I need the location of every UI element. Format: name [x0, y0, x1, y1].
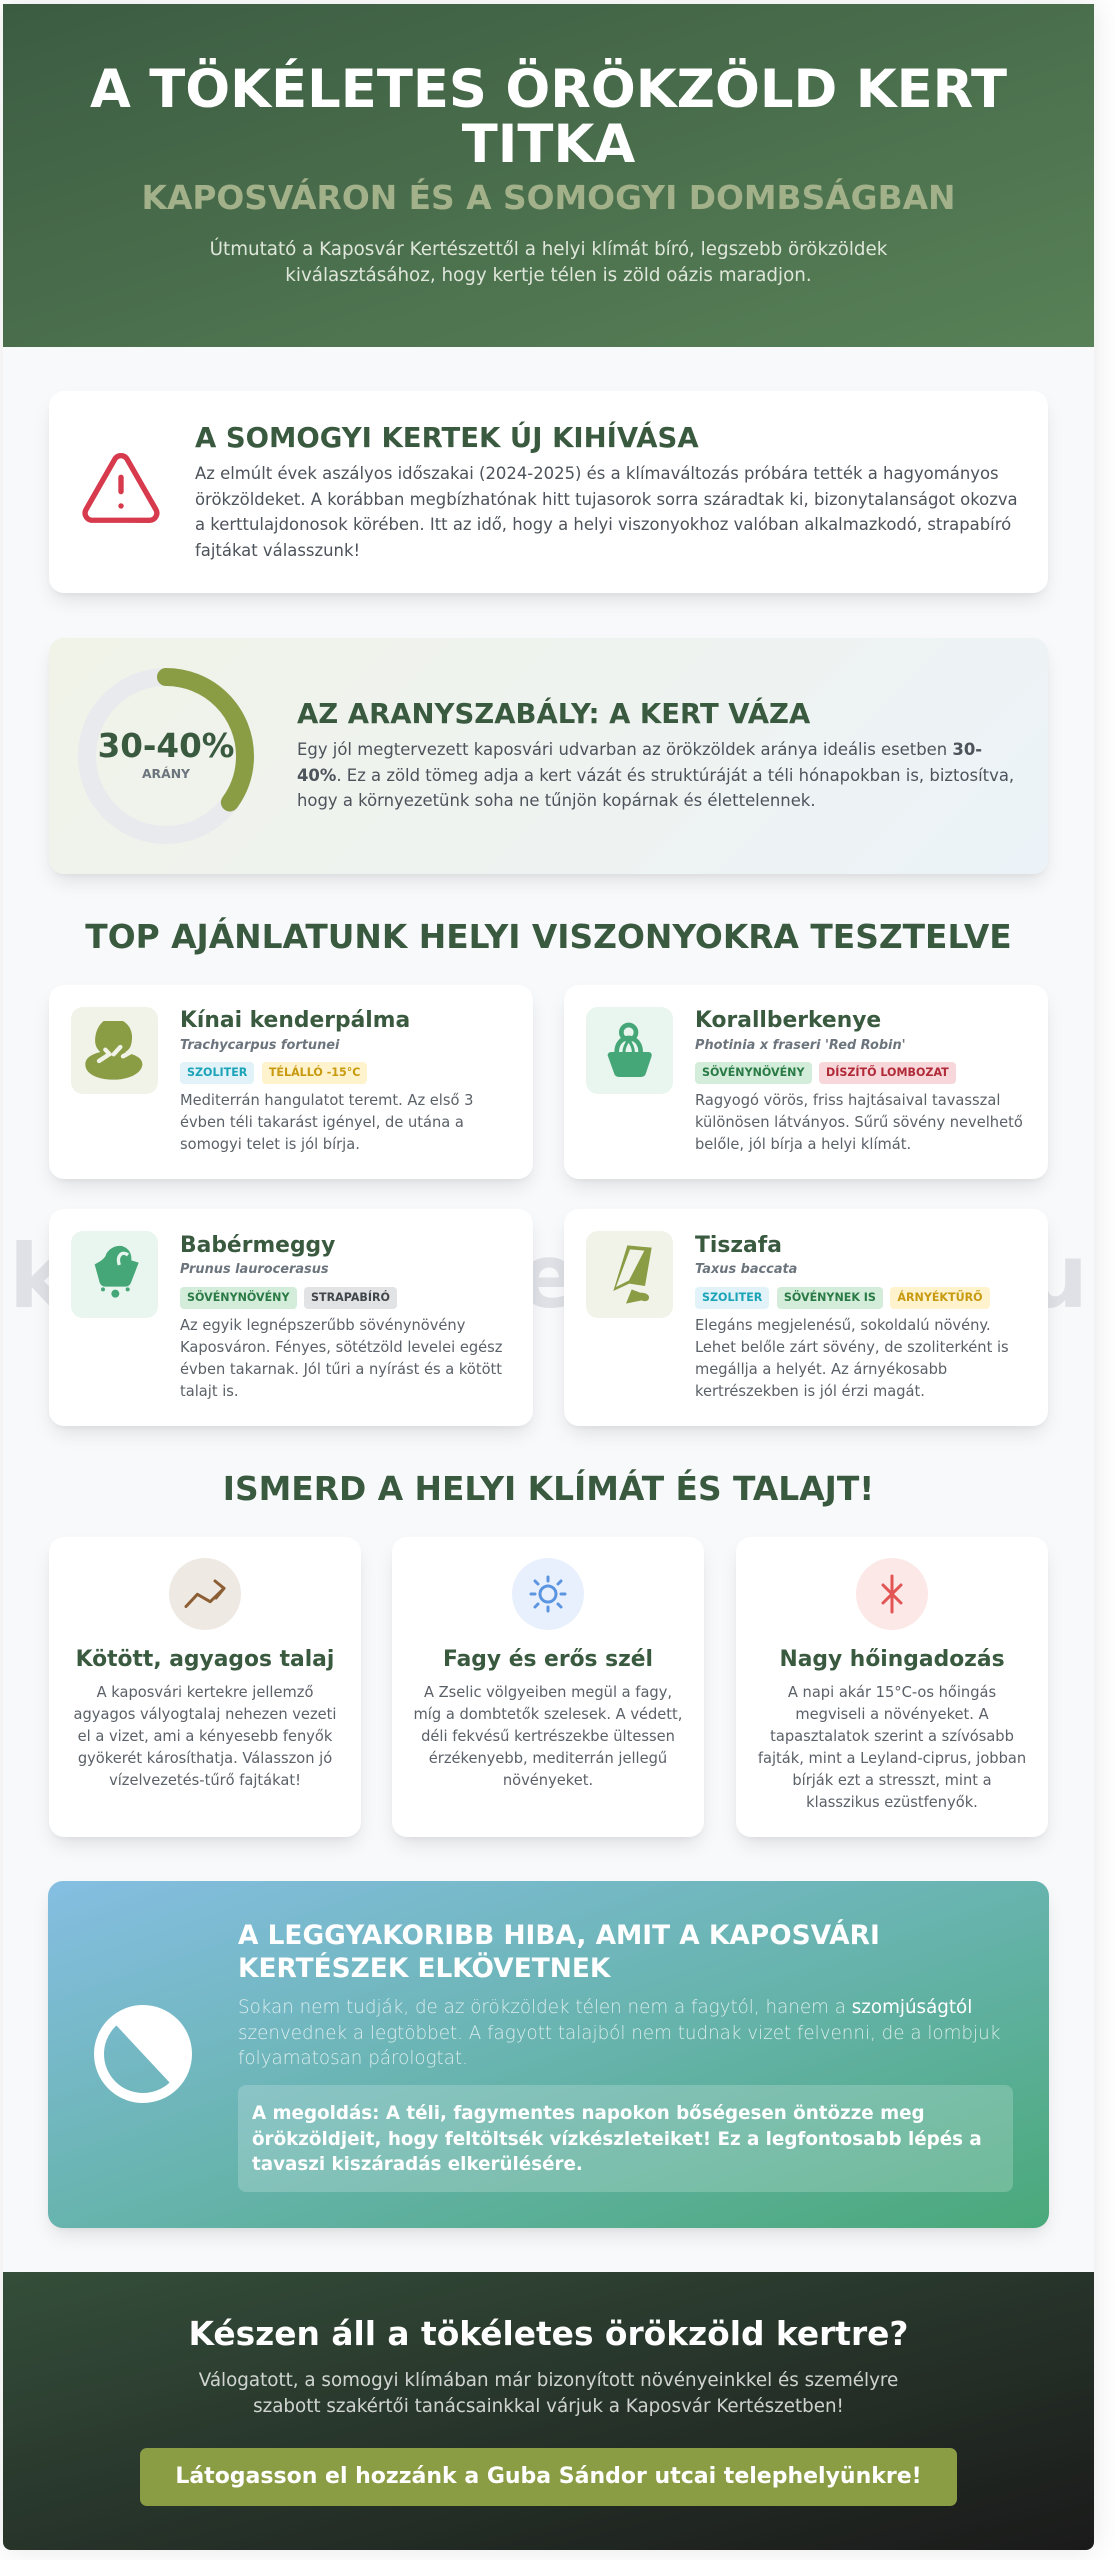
- icon: asterisk: [856, 1558, 928, 1630]
- description: Mediterrán hangulatot teremt. Az első 3: [180, 1092, 473, 1109]
- tags: [695, 1062, 956, 1084]
- plant card: Babérmeggy: [49, 1209, 533, 1426]
- latin name: Prunus laurocerasus: [180, 1262, 329, 1277]
- donut label: ARÁNY: [142, 766, 190, 781]
- description: [180, 1317, 502, 1400]
- plant name: Kínai kenderpálma: [180, 1008, 410, 1033]
- CTA button: [140, 2448, 957, 2506]
- card text: vízelvezetés-tűrő fajtákat!: [109, 1772, 301, 1789]
- mistake text: szenvednek a legtöbbet. A fagyott talajból nem tudnak vizet felvenni, de a lombjuk: [238, 2023, 1000, 2044]
- golden rule text: [297, 740, 1014, 810]
- mistake heading: A LEGGYAKORIBB HIBA, AMIT A KAPOSVÁRI: [238, 1920, 880, 1950]
- challenge text: [195, 464, 1018, 560]
- description: Ragyogó vörös, friss hajtásaival tavasszal: [695, 1092, 1000, 1109]
- card text: [74, 1684, 336, 1789]
- description: Elegáns megjelenésű, sokoldalú növény.: [695, 1317, 991, 1334]
- tags: SÖVÉNYNÖVÉNY: [187, 1291, 290, 1304]
- latin name: Photinia x fraseri 'Red Robin': [695, 1038, 906, 1053]
- challenge heading: A SOMOGYI KERTEK ÚJ KIHÍVÁSA: [195, 422, 699, 454]
- golden rule text: Egy jól megtervezett kaposvári udvarban az örökzöldek aránya ideális esetben 30-: [297, 740, 982, 759]
- description: Kaposváron. Fényes, sötétzöld levelei egész: [180, 1339, 502, 1356]
- panel: common mistake: [48, 1881, 1049, 2228]
- solution text: [252, 2103, 982, 2175]
- card heading: Fagy és erős szél: [443, 1647, 653, 1672]
- card text: míg a dombtetők szelesek. A védett,: [414, 1706, 682, 1723]
- climate card: temperature swings: [736, 1537, 1048, 1837]
- icon: laurel: [71, 1231, 158, 1318]
- card text: A kaposvári kertekre jellemző: [97, 1684, 313, 1701]
- tags: TÉLÁLLÓ -15°C: [269, 1066, 360, 1079]
- plant name: Korallberkenye: [695, 1008, 881, 1033]
- description: évben téli takarást igényel, de utána a: [180, 1114, 464, 1131]
- card text: fajták, mint a Leyland-ciprus, jobban: [758, 1750, 1026, 1767]
- card text: agyagos vályogtalaj nehezen vezeti: [74, 1706, 336, 1723]
- golden rule text: 40%. Ez a zöld tömeg adja a kert vázát és struktúráját a téli hónapokban is, biztosítva,: [297, 766, 1014, 785]
- heading: top recommendations: TOP AJÁNLATUNK HELYI VISZONYOKRA TESZTELVE: [85, 918, 1012, 956]
- solution box: [238, 2085, 1013, 2192]
- solution text: örökzöldjeit, hogy feltöltsék vízkészleteiket! Ez a legfontosabb lépés a: [252, 2129, 982, 2150]
- card heading: Nagy hőingadozás: [779, 1647, 1005, 1672]
- plant name: Tiszafa: [695, 1233, 782, 1258]
- plant card: Korallberkenye: [564, 985, 1048, 1179]
- donut value: 30-40%: [98, 727, 234, 765]
- intro text: kiválasztásához, hogy kertje télen is zöld oázis maradjon.: [285, 265, 812, 286]
- tags: SZOLITER: [187, 1066, 247, 1079]
- challenge text: fajtákat válasszunk!: [195, 541, 360, 560]
- plant card: Tiszafa: [564, 1209, 1048, 1426]
- description: különösen látványos. Sűrű sövény nevelhető: [695, 1114, 1023, 1131]
- mistake heading: [238, 1919, 880, 1984]
- donut chart: 30-40%: [78, 668, 254, 844]
- call to action footer: [3, 2272, 1094, 2550]
- CTA button: Látogasson el hozzánk a Guba Sándor utcai telephelyünkre!: [175, 2464, 922, 2489]
- CTA text: szabott szakértői tanácsainkkal várjuk a Kaposvár Kertészetben!: [253, 2396, 844, 2417]
- tags: SZOLITER: [702, 1291, 762, 1304]
- card text: tapasztalatok szerint a szívósabb: [770, 1728, 1014, 1745]
- CTA heading: Készen áll a tökéletes örökzöld kertre?: [188, 2315, 908, 2353]
- panel: golden rule: [49, 638, 1048, 874]
- plant name: Babérmeggy: [180, 1233, 335, 1258]
- challenge text: örökzöldeket. A korábban megbízhatónak hitt tujasorok sorra száradtak ki, bizonytalanságot okozva: [195, 490, 1018, 509]
- card text: növényeket.: [503, 1772, 593, 1789]
- watermark text: kaposvarkerteszet.hu: [9, 1224, 1088, 1328]
- icon: sun: [512, 1558, 584, 1630]
- card heading: Kötött, agyagos talaj: [76, 1647, 334, 1672]
- solution text: A megoldás: A téli, fagymentes napokon bőségesen öntözze meg: [252, 2103, 925, 2124]
- card text: klasszikus ezüstfenyők.: [806, 1794, 978, 1811]
- CTA text: Válogatott, a somogyi klímában már bizonyított növényeinkkel és személyre: [199, 2370, 898, 2391]
- description: [695, 1092, 1023, 1153]
- card text: el a vizet, ami a kényesebb fenyők: [78, 1728, 332, 1745]
- latin name: Trachycarpus fortunei: [180, 1038, 339, 1053]
- tags: DÍSZÍTŐ LOMBOZAT: [826, 1066, 949, 1079]
- mistake text: folyamatosan párologtat.: [238, 2048, 468, 2069]
- description: Az egyik legnépszerűbb sövénynövény: [180, 1317, 465, 1334]
- icon: warning triangle: [82, 453, 160, 523]
- mistake text: Sokan nem tudják, de az örökzöldek télen nem a fagytól, hanem a szomjúságtól: [238, 1997, 972, 2018]
- icon: yew: [586, 1231, 673, 1318]
- tags: SÖVÉNYNEK IS: [784, 1291, 876, 1304]
- tags: STRAPABÍRÓ: [311, 1291, 390, 1304]
- CTA text: [198, 2370, 898, 2417]
- card text: megviseli a növényeket. A: [795, 1706, 989, 1723]
- card text: déli fekvésű kertrészekbe ültessen: [421, 1728, 675, 1745]
- description: [695, 1317, 1009, 1400]
- icon: palm: [71, 1007, 158, 1094]
- intro text: [210, 238, 888, 286]
- description: évben takarnak. Jól tűri a nyírást és a kötött: [180, 1361, 502, 1378]
- description: megállja a helyét. Az árnyékosabb: [695, 1361, 947, 1378]
- plant card: Kínai kenderpálma: [49, 985, 533, 1179]
- description: belőle, jól bírja a helyi klímát.: [695, 1136, 911, 1153]
- header banner: [3, 4, 1094, 347]
- description: talajt is.: [180, 1383, 239, 1400]
- tags: [180, 1062, 367, 1084]
- golden rule text: hogy a környezetünk soha ne tűnjön kopárnak és élettelennek.: [297, 791, 816, 810]
- tags: [180, 1287, 397, 1309]
- intro text: Útmutató a Kaposvár Kertészettől a helyi klímát bíró, legszebb örökzöldek: [210, 239, 887, 260]
- climate card: frost and wind: [392, 1537, 704, 1837]
- mistake text: [238, 1997, 1000, 2069]
- card text: gyökerét károsíthatja. Válasszon jó: [78, 1750, 332, 1767]
- card text: A Zselic völgyeiben megül a fagy,: [424, 1684, 672, 1701]
- card text: érzékenyebb, mediterrán jellegű: [429, 1750, 667, 1767]
- panel: challenge: [49, 391, 1048, 593]
- title: A TÖKÉLETES ÖRÖKZÖLD KERT: [90, 59, 1007, 120]
- card text: [758, 1684, 1026, 1811]
- description: somogyi telet is jól bírja.: [180, 1136, 360, 1153]
- description: Lehet belőle zárt sövény, de szoliterként is: [695, 1339, 1009, 1356]
- description: kertrészekben is jól érzi magát.: [695, 1383, 925, 1400]
- subtitle: KAPOSVÁRON ÉS A SOMOGYI DOMBSÁGBAN: [142, 179, 955, 217]
- card text: [414, 1684, 682, 1789]
- mistake heading: KERTÉSZEK ELKÖVETNEK: [238, 1952, 610, 1984]
- golden rule heading: AZ ARANYSZABÁLY: A KERT VÁZA: [297, 698, 810, 730]
- title: TITKA: [462, 114, 635, 175]
- tags: SÖVÉNYNÖVÉNY: [702, 1066, 805, 1079]
- title: [90, 58, 1007, 175]
- heading: climate and soil: ISMERD A HELYI KLÍMÁT ÉS TALAJT!: [223, 1470, 874, 1508]
- card text: A napi akár 15°C-os hőingás: [788, 1684, 996, 1701]
- icon: shrub: [586, 1007, 673, 1094]
- challenge text: Az elmúlt évek aszályos időszakai (2024-2025) és a klímaváltozás próbára tették a hagyományos: [195, 464, 999, 483]
- description: [180, 1092, 473, 1153]
- icon: half circle: [94, 2005, 192, 2103]
- latin name: Taxus baccata: [695, 1262, 797, 1277]
- icon: trend arrow: [169, 1558, 241, 1630]
- tags: ÁRNYÉKTŰRŐ: [897, 1291, 983, 1304]
- card text: bírják ezt a stresszt, mint a: [792, 1772, 992, 1789]
- solution text: tavaszi kiszáradás elkerülésére.: [252, 2154, 583, 2175]
- climate card: soil: [49, 1537, 361, 1837]
- challenge text: a kerttulajdonosok körében. Itt az idő, hogy a helyi viszonyokhoz valóban alkalmazkodó, strapabíró: [195, 515, 1011, 534]
- tags: [695, 1287, 990, 1309]
